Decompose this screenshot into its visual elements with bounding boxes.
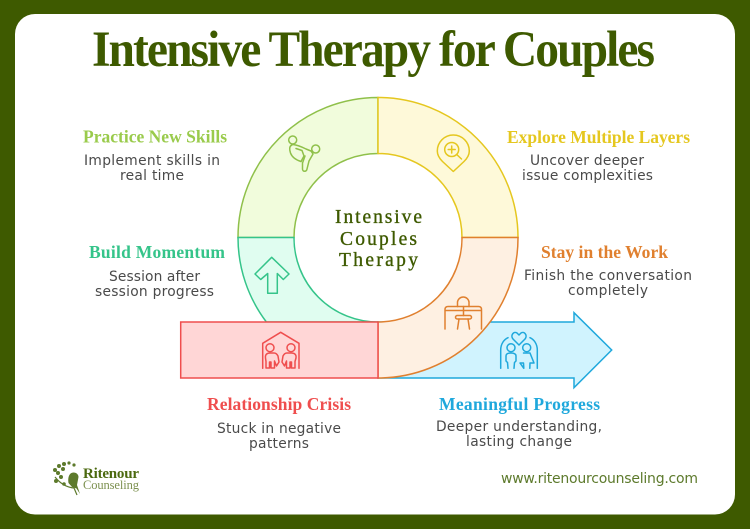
icon: up arrow [255, 257, 289, 293]
ring segment: build momentum [238, 238, 378, 322]
description [436, 419, 602, 450]
description: Stuck in negative [217, 421, 341, 437]
arrow: meaningful progress [378, 313, 612, 388]
ring segment: stay in the work [378, 238, 518, 378]
icon: location magnifier [437, 135, 469, 172]
center line 1: Intensive [335, 207, 422, 228]
icon: desk [445, 297, 482, 329]
text block: stay in the work [524, 242, 692, 299]
description: session progress [95, 284, 214, 300]
heading: Meaningful Progress [439, 394, 600, 414]
description: patterns [249, 436, 309, 452]
logo [53, 461, 140, 495]
center line 3: Therapy [339, 250, 418, 271]
description [217, 421, 341, 452]
heading: Explore Multiple Layers [507, 127, 690, 147]
ring segment: explore multiple layers [378, 98, 518, 238]
description: completely [568, 283, 648, 299]
description: Deeper understanding, [436, 419, 602, 435]
center line 2: Couples [340, 229, 417, 250]
logo wordmark top: Ritenour [83, 466, 139, 482]
description [84, 153, 220, 184]
description: Session after [109, 269, 200, 285]
description: Uncover deeper [530, 153, 644, 169]
text block: meaningful progress [436, 394, 602, 450]
ring segment: practice new skills [238, 98, 378, 238]
text block: relationship crisis [207, 394, 351, 452]
text block: build momentum [89, 242, 225, 300]
description [522, 153, 653, 184]
description: Implement skills in [84, 153, 220, 169]
text block: practice new skills [83, 126, 227, 184]
description [524, 268, 692, 299]
heading: Stay in the Work [541, 242, 668, 262]
description: issue complexities [522, 168, 653, 184]
description: lasting change [466, 434, 572, 450]
center label [335, 207, 422, 271]
description: Finish the conversation [524, 268, 692, 284]
heading: Relationship Crisis [207, 394, 351, 414]
icon: couple under heart [501, 332, 537, 368]
heading: Build Momentum [89, 242, 225, 262]
logo wordmark bottom: Counseling [83, 478, 140, 492]
website url: www.ritenourcounseling.com [501, 471, 698, 487]
logo bird on branch [53, 461, 80, 495]
icon: practice figures [289, 136, 320, 171]
box: relationship crisis [181, 322, 378, 378]
heading: Practice New Skills [83, 126, 227, 146]
description [95, 269, 214, 300]
title: Intensive Therapy for Couples [92, 21, 655, 77]
text block: explore multiple layers [507, 127, 690, 184]
description: real time [120, 168, 184, 184]
icon: family in house [263, 332, 299, 368]
